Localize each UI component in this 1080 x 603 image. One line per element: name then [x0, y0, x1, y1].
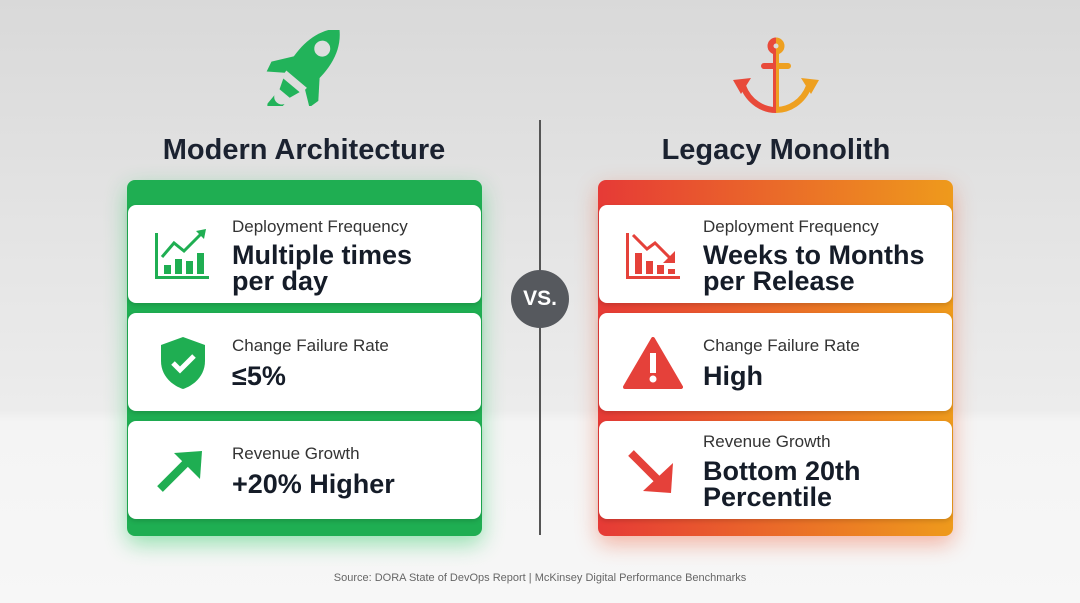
card: failure modern: Change Failure Rate	[232, 336, 389, 355]
icon: anchor	[733, 38, 819, 113]
card: deployment legacy: Deployment Frequency	[703, 217, 879, 236]
vs badge: VS.	[523, 287, 557, 310]
card: deployment modern	[128, 205, 481, 303]
panel: legacy	[598, 180, 953, 536]
card: revenue legacy: Revenue Growth	[703, 432, 831, 451]
card: deployment legacy: per Release	[703, 266, 855, 296]
icon: rocket	[266, 30, 340, 106]
card: revenue legacy: Bottom 20th	[703, 456, 860, 486]
card: failure legacy: High	[703, 361, 763, 391]
card: revenue modern	[128, 421, 481, 519]
title: legacy: Legacy Monolith	[662, 134, 890, 166]
card: revenue modern: Revenue Growth	[232, 444, 360, 463]
card: revenue legacy: Percentile	[703, 482, 832, 512]
card: deployment modern: Multiple times	[232, 240, 412, 270]
card: deployment legacy: Weeks to Months	[703, 240, 925, 270]
card: failure modern	[128, 313, 481, 411]
vs badge	[511, 270, 569, 328]
card: deployment legacy	[599, 205, 952, 303]
card: failure legacy	[599, 313, 952, 411]
panel: modern	[127, 180, 482, 536]
card: deployment modern: Deployment Frequency	[232, 217, 408, 236]
title: modern: Modern Architecture	[163, 134, 445, 166]
card: revenue legacy	[599, 421, 952, 519]
source: Source: DORA State of DevOps Report | McKinsey Digital Performance Benchmarks	[334, 572, 746, 584]
divider	[539, 120, 541, 535]
card: failure modern: ≤5%	[232, 361, 286, 391]
card: failure legacy: Change Failure Rate	[703, 336, 860, 355]
card: deployment modern: per day	[232, 266, 328, 296]
card: revenue modern: +20% Higher	[232, 469, 395, 499]
